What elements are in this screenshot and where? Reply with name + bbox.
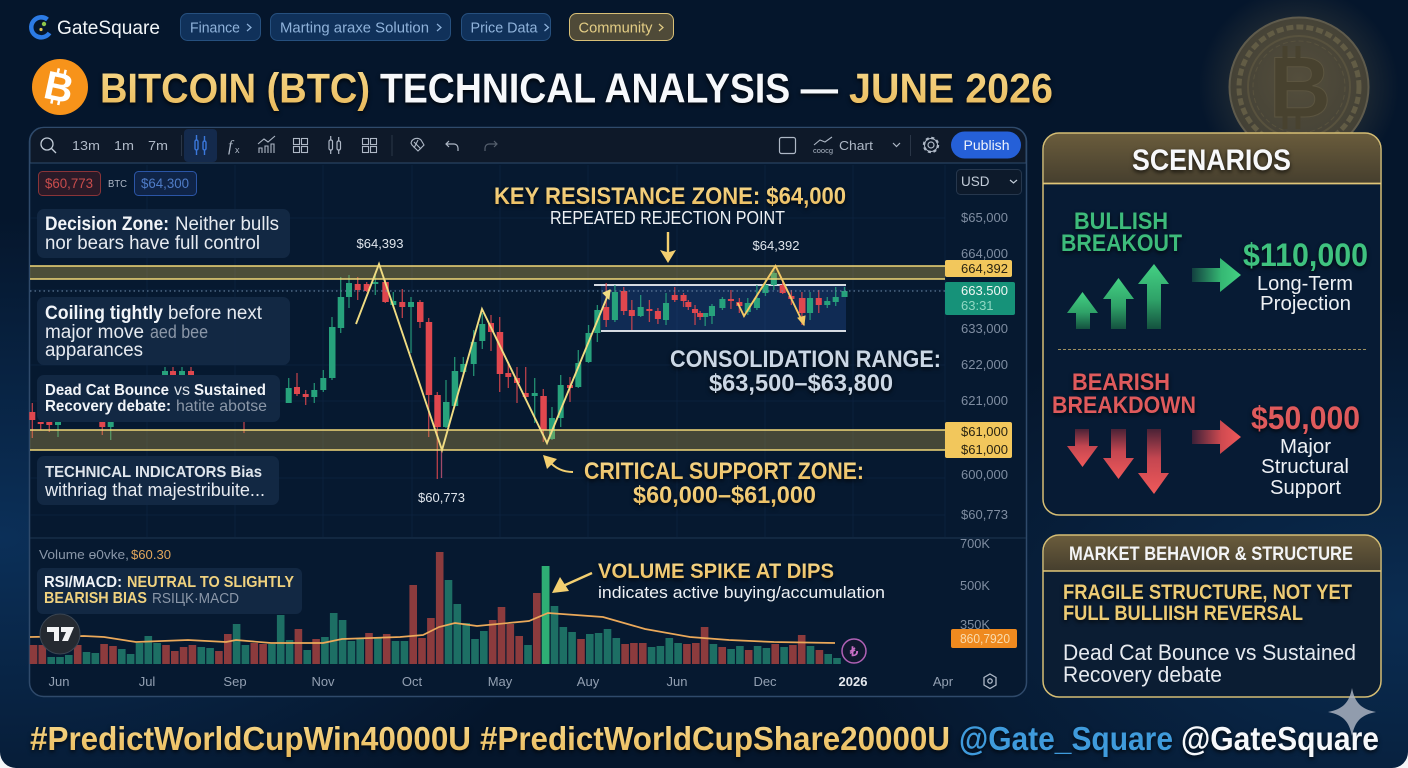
consolidation range box xyxy=(594,285,846,331)
price tags: BTC xyxy=(108,179,127,190)
scenario: bullish breakout: BULLISH xyxy=(1074,208,1168,235)
time axis: Jun xyxy=(667,674,687,689)
title text: BITCOIN (BTC) xyxy=(100,64,370,112)
chart grid xyxy=(30,165,945,537)
decorative bitcoin coin xyxy=(1212,0,1386,134)
price label: support 61,000 xyxy=(945,422,1012,458)
text card: coiling tightly: aed bee xyxy=(150,322,208,342)
callout: consolidation range: CONSOLIDATION RANGE: xyxy=(670,346,941,373)
text card: decision zone: Neither bulls xyxy=(175,214,279,235)
green wicks xyxy=(58,273,578,440)
price label: current 663,500 xyxy=(945,282,1015,315)
icon: bitcoin badge: B xyxy=(40,63,78,112)
price label: 664,392 xyxy=(945,260,1012,277)
callout: volume spike at dips xyxy=(552,560,885,602)
callout: critical support zone: CRITICAL SUPPORT ZONE: xyxy=(584,458,864,485)
navigation pills: Community xyxy=(578,20,653,36)
toolbar: coocg xyxy=(813,148,833,155)
icon: settings hexagon xyxy=(984,674,996,688)
scenario: bearish breakdown: $50,000 xyxy=(1251,400,1360,436)
green bodies xyxy=(585,273,848,362)
callout: consolidation range xyxy=(670,346,941,397)
heading: scenarios: SCENARIOS xyxy=(1132,144,1291,177)
navigation pills: Finance xyxy=(190,20,240,36)
price annotations: $64,392 xyxy=(752,238,800,253)
red wicks xyxy=(606,280,819,330)
footer rule xyxy=(30,712,1380,714)
text block: dead cat bounce debate xyxy=(1063,640,1356,687)
scenario: bearish breakdown xyxy=(1052,369,1360,499)
icon: bitcoin badge xyxy=(32,59,88,115)
volume title: Volume ɵ0vke, xyxy=(39,547,129,562)
navigation pills xyxy=(180,14,674,40)
scenario: bullish breakout xyxy=(1061,208,1368,329)
text card: decision zone xyxy=(37,209,290,258)
support zone band xyxy=(30,430,945,450)
text card: RSI / MACD xyxy=(37,568,302,614)
scenario: bullish breakout: BREAKOUT xyxy=(1061,230,1182,257)
red bodies xyxy=(603,285,822,320)
icon: three up arrows xyxy=(1067,264,1169,329)
text card: RSI / MACD: RSIЦK·MACD xyxy=(152,590,239,607)
title with bitcoin badge xyxy=(32,59,1053,115)
scenario: bullish breakout: Long-Term xyxy=(1257,273,1353,295)
navigation pills: Price Data xyxy=(470,20,538,36)
time axis: Nov xyxy=(311,674,335,689)
text card: coiling tightly: major move xyxy=(45,322,144,343)
text card: coiling tightly: Coiling tightly xyxy=(45,303,163,324)
callout: key resistance zone: KEY RESISTANCE ZONE: $64,000 xyxy=(494,183,846,210)
callout: critical support zone xyxy=(543,455,864,509)
price axis xyxy=(945,170,1022,522)
title text: JUNE 2026 xyxy=(849,64,1053,112)
footer hashtags xyxy=(30,720,1379,757)
time axis: Jun xyxy=(49,674,69,689)
text block: fragile structure: FULL BULLIISH REVERSAL xyxy=(1063,602,1303,625)
text card: decision zone: Decision Zone: xyxy=(45,214,169,235)
volume axis: 700K xyxy=(960,536,990,551)
red wicks xyxy=(32,277,570,479)
volume axis: 350K xyxy=(960,617,990,632)
time axis: May xyxy=(488,674,513,689)
currency selector: USD xyxy=(961,174,990,189)
toolbar xyxy=(30,128,1026,163)
red volume bars xyxy=(34,552,819,664)
volume title xyxy=(39,547,171,562)
scenario: bullish breakout: $110,000 xyxy=(1243,237,1368,273)
scenario: bearish breakdown: BREAKDOWN xyxy=(1052,392,1196,419)
price label: current 663,500: 63:31 xyxy=(961,298,994,313)
arrow: down to resistance xyxy=(660,232,676,263)
price label: volume orange: 860,7920 xyxy=(960,631,1010,646)
icon: sparkle star xyxy=(1328,688,1376,736)
toolbar: 7m xyxy=(148,138,168,153)
price path lines xyxy=(356,264,805,450)
low wick xyxy=(440,450,442,478)
price label: 664,392: 664,392 xyxy=(961,261,1008,276)
volume separator xyxy=(30,537,1026,539)
arrow: to bullish target xyxy=(1192,258,1241,292)
price label: volume orange xyxy=(951,629,1017,648)
price axis: 622,000 xyxy=(961,357,1008,372)
toolbar: 13m xyxy=(72,138,100,153)
callout: key resistance zone: REPEATED REJECTION POINT xyxy=(550,208,785,228)
callout: critical support zone: $60,000–$61,000 xyxy=(633,482,816,509)
footer hashtags: @GateSquare xyxy=(1181,720,1379,757)
price label: support 61,000: $61,000 xyxy=(961,424,1008,439)
publish button: Publish xyxy=(964,137,1010,153)
volume title: $60.30 xyxy=(131,547,171,562)
text card: decision zone: nor bears have full control xyxy=(45,233,260,254)
highlighted volume spike xyxy=(542,566,550,664)
time axis: Dec xyxy=(753,674,777,689)
text block: dead cat bounce debate: Recovery debate xyxy=(1063,662,1222,687)
time axis: Auy xyxy=(577,674,600,689)
time axis: Sep xyxy=(223,674,247,689)
text card: dead cat bounce: vs xyxy=(174,382,190,399)
text card: dead cat bounce: Sustained xyxy=(194,382,266,399)
text card: coiling tightly xyxy=(37,297,290,365)
green wicks xyxy=(589,268,845,363)
text card: coiling tightly: apparances xyxy=(45,340,143,361)
price annotations: $60,773 xyxy=(418,490,465,505)
toolbar: x xyxy=(235,145,240,155)
price axis: 621,000 xyxy=(961,393,1008,408)
price axis: 600,000 xyxy=(961,467,1008,482)
callout: volume spike at dips: VOLUME SPIKE AT DIPS xyxy=(598,560,834,583)
icon: currency badge xyxy=(842,639,866,663)
volume chart xyxy=(30,552,837,664)
arrow: to volume spike xyxy=(552,573,592,593)
time axis xyxy=(49,674,954,689)
scenario: bearish breakdown: BEARISH xyxy=(1072,369,1170,396)
text card: technical indicators xyxy=(37,456,279,505)
resistance zone band xyxy=(30,266,945,279)
toolbar: Chart xyxy=(839,138,873,153)
scenario: bearish breakdown: Support xyxy=(1270,477,1341,499)
current price dotted line xyxy=(30,290,945,292)
decorative bitcoin coin: B xyxy=(1269,40,1331,136)
text block: fragile structure: FRAGILE STRUCTURE, NOT YET xyxy=(1063,581,1352,604)
toolbar: 1m xyxy=(114,138,134,153)
price axis: $65,000 xyxy=(961,210,1008,225)
text card: dead cat bounce xyxy=(37,375,280,422)
scenario: bullish breakout: Projection xyxy=(1260,293,1351,315)
text card: technical indicators: TECHNICAL INDICATORS Bias xyxy=(45,464,262,481)
price annotations: $64,393 xyxy=(356,236,404,251)
price tags xyxy=(38,172,196,196)
text card: coiling tightly: before next xyxy=(168,303,263,324)
dashed divider xyxy=(1058,348,1366,350)
volume axis xyxy=(960,536,990,632)
red bodies xyxy=(29,282,573,430)
volume axis: 500K xyxy=(960,578,990,593)
price axis: 633,000 xyxy=(961,321,1008,336)
time axis: 2026 xyxy=(839,674,867,689)
icon: tradingview logo xyxy=(40,614,80,654)
panel: chart xyxy=(29,128,1027,696)
icon: currency badge: ₺ xyxy=(849,644,859,659)
time axis: Apr xyxy=(933,674,954,689)
text card: dead cat bounce: hatite abotse xyxy=(176,398,267,415)
price label: support 61,000: $61,000 xyxy=(961,442,1008,457)
heading: market behavior: MARKET BEHAVIOR & STRUCTURE xyxy=(1069,544,1353,565)
time axis: Oct xyxy=(402,674,422,689)
candlesticks: recovery and consolidation xyxy=(585,268,848,363)
price label: current 663,500: 663.500 xyxy=(961,283,1008,298)
panel: scenarios xyxy=(1043,133,1381,515)
callout: key resistance zone xyxy=(494,183,846,263)
text block: dead cat bounce debate: Dead Cat Bounce vs Sustained xyxy=(1063,640,1356,665)
title text: TECHNICAL ANALYSIS — xyxy=(380,64,838,112)
time axis: Jul xyxy=(139,674,155,689)
scenario: bearish breakdown: Major xyxy=(1280,436,1331,458)
brand logo: GateSquare: GateSquare xyxy=(57,17,160,39)
title text xyxy=(100,64,1053,112)
price axis: 664,000 xyxy=(961,246,1008,261)
toolbar: f xyxy=(228,138,235,155)
price tags: $60,773 xyxy=(45,176,93,191)
green volume bars xyxy=(51,580,837,664)
panel: market behavior and structure xyxy=(1043,535,1381,697)
text card: RSI / MACD: RSI/MACD: xyxy=(44,574,122,591)
price annotations xyxy=(356,236,800,505)
scenario: bearish breakdown: Structural xyxy=(1261,456,1349,478)
callout: volume spike at dips: indicates active buying/accumulation xyxy=(598,583,885,602)
arrow: to bearish target xyxy=(1192,420,1241,454)
price tags: $64,300 xyxy=(141,176,189,191)
footer hashtags: #PredictWorldCupWin40000U xyxy=(30,720,471,757)
text card: RSI / MACD: NEUTRAL TO SLIGHTLY xyxy=(127,574,295,591)
navigation pills: Marting araxe Solution xyxy=(280,20,429,36)
text card: dead cat bounce: Recovery debate: xyxy=(45,398,171,415)
price axis: $60,773 xyxy=(961,507,1008,522)
candlestick chart xyxy=(29,273,581,479)
moving average line xyxy=(30,613,835,643)
currency selector xyxy=(956,170,1022,194)
text block: fragile structure xyxy=(1063,581,1352,625)
footer hashtags: #PredictWorldCupShare20000U xyxy=(480,720,950,757)
publish button xyxy=(951,132,1021,158)
icon: three down arrows xyxy=(1067,429,1169,494)
footer hashtags: @Gate_Square xyxy=(959,720,1173,757)
green bodies xyxy=(55,282,581,439)
arrow: curved to support xyxy=(543,455,573,472)
text card: technical indicators: withriag that majestribuite... xyxy=(44,480,265,500)
callout: consolidation range: $63,500–$63,800 xyxy=(709,370,893,397)
text card: RSI / MACD: BEARISH BIAS xyxy=(44,590,147,607)
text card: dead cat bounce: Dead Cat Bounce xyxy=(45,382,169,399)
